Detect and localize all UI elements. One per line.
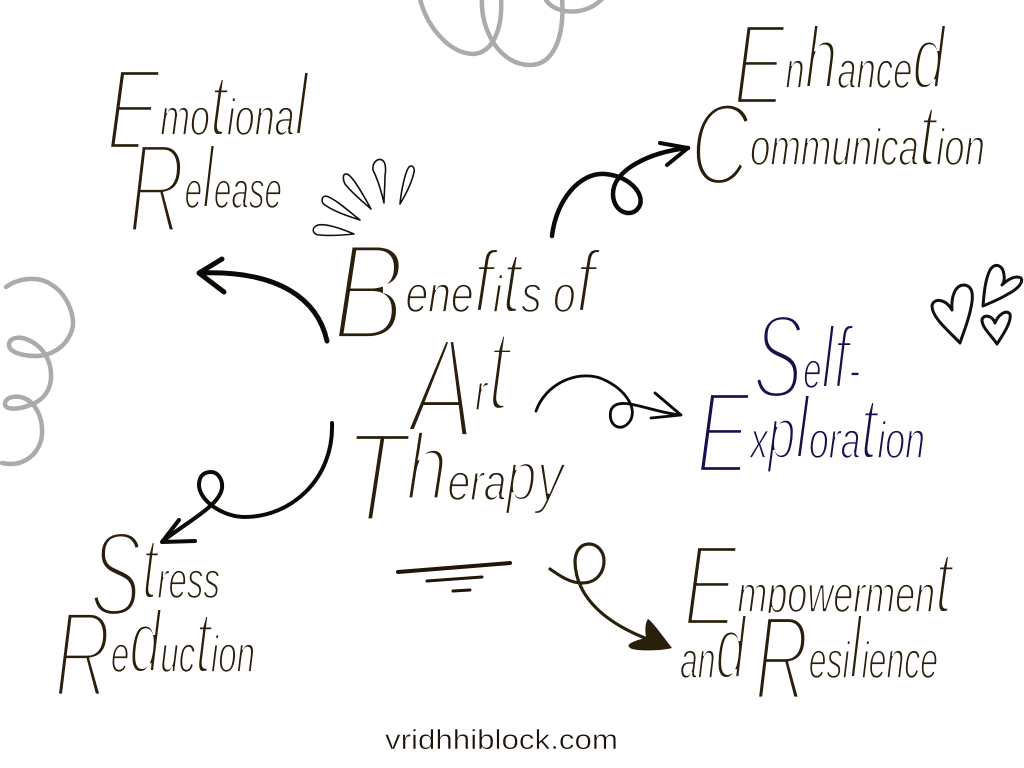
label: Empowerment and Resilience: and (680, 598, 765, 697)
label: Enhanced Communication: n (785, 42, 805, 100)
label: Stress Reduction: S (90, 506, 142, 642)
label: Self-Exploration: S (753, 290, 803, 424)
title: Benefits of Art Therapy: T (344, 404, 413, 550)
label: Emotional Release: mo (160, 89, 210, 147)
label: Self-Exploration: e (803, 342, 821, 400)
label: Enhanced Communication (690, 0, 985, 211)
icon: hearts (932, 265, 1022, 344)
label: Enhanced Communication: E (733, 0, 786, 131)
decoration: grey spiral top (420, 0, 603, 65)
title: Benefits of Art Therapy: A (402, 307, 475, 469)
label: Emotional Release: e (185, 162, 202, 220)
label: Empowerment and Resilience (680, 520, 954, 726)
label: Emotional Release: lease (202, 128, 327, 227)
title: Benefits of Art Therapy: B (332, 213, 405, 370)
label: Stress Reduction (54, 506, 255, 724)
label: Stress Reduction: R (54, 586, 111, 724)
footer: website: vridhhiblock.com (385, 724, 618, 755)
label: Self-Exploration: x (748, 412, 769, 470)
arrow: to Stress Reduction (162, 423, 332, 542)
label: Enhanced Communication: tion (919, 85, 1006, 184)
label: Emotional Release: E (106, 44, 161, 176)
label: Self-Exploration: lf- (821, 308, 866, 407)
label: Empowerment and Resilience: R (755, 590, 809, 726)
label: Empowerment and Resilience: t (935, 532, 954, 631)
label: Stress Reduction: ress (157, 552, 220, 610)
label: Stress Reduction: t (142, 518, 160, 617)
label: Self-Exploration: E (696, 367, 751, 499)
arrow: to Self-Exploration (536, 376, 681, 427)
label: Empowerment and Resilience: mpowermen (737, 566, 935, 624)
label: Self-Exploration: ploration (768, 378, 947, 477)
icon: sparkle petals (313, 159, 414, 235)
title: Benefits of Art Therapy: t (487, 304, 513, 436)
title underline strokes (398, 563, 510, 591)
label: Empowerment and Resilience: esi (809, 632, 850, 690)
label: Emotional Release: tional (210, 55, 325, 154)
title: Benefits of Art Therapy: erapy (448, 437, 580, 515)
title: Benefits of Art Therapy: h (406, 414, 448, 521)
arrow: to Enhanced Communication (552, 143, 688, 236)
label: Emotional Release (106, 44, 310, 261)
decoration: grey spiral left (2, 279, 73, 464)
arrow: to Empowerment and Resilience (550, 544, 672, 650)
title: Benefits of Art Therapy: r (475, 364, 489, 422)
label: Empowerment and Resilience: E (683, 520, 738, 652)
title: Benefits of Art Therapy (332, 213, 602, 550)
title: Benefits of Art Therapy: ene (405, 266, 474, 324)
label: Self-Exploration (696, 290, 925, 499)
arrow: to Emotional Release (199, 259, 327, 341)
label: Stress Reduction: duction (129, 592, 280, 691)
label: Stress Reduction: e (111, 626, 129, 684)
label: Enhanced Communication: ommunica (750, 119, 919, 177)
label: Emotional Release: R (128, 115, 185, 261)
label: Enhanced Communication: hanced (805, 8, 961, 107)
label: Empowerment and Resilience: lience (850, 598, 986, 697)
label: Enhanced Communication: C (690, 79, 751, 211)
title: Benefits of Art Therapy: fits of (474, 232, 600, 331)
